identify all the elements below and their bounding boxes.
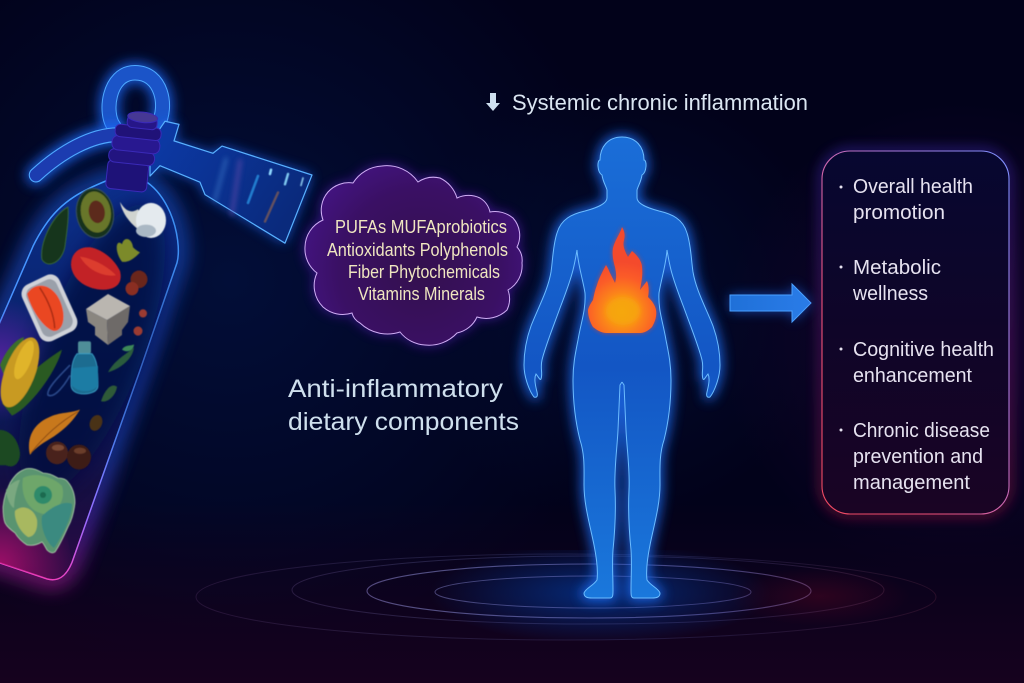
body silhouette xyxy=(524,137,622,598)
small leaf yellow xyxy=(117,239,140,262)
herb sprigs xyxy=(108,344,134,372)
label: anti-inflammatory dietary components xyxy=(288,375,519,436)
hazelnuts xyxy=(126,271,148,295)
cloud shape xyxy=(305,166,522,345)
cabbage xyxy=(3,468,75,553)
list: outcomes: management xyxy=(853,472,970,494)
broccoli xyxy=(0,430,20,466)
left arm xyxy=(36,135,118,175)
list: outcomes: Metabolic xyxy=(853,257,941,279)
berries xyxy=(134,309,147,336)
list: outcomes xyxy=(840,176,994,494)
wire curl xyxy=(48,365,70,396)
avocado xyxy=(73,185,117,241)
list: outcomes: promotion xyxy=(853,202,945,224)
tofu cube xyxy=(86,294,130,345)
label: anti-inflammatory dietary components: dietary components xyxy=(288,408,519,436)
bottle dark interior xyxy=(0,187,195,513)
leaf: dark green xyxy=(42,207,68,264)
floor rings xyxy=(196,550,936,640)
garlic xyxy=(120,202,166,238)
list: outcomes: enhancement xyxy=(853,365,972,387)
food items xyxy=(0,185,166,553)
oil bottle xyxy=(71,341,98,394)
salmon plate xyxy=(18,271,81,345)
human body figure xyxy=(524,137,720,598)
list: outcomes: Overall health xyxy=(853,176,973,198)
bottle neck and cap xyxy=(105,109,163,193)
extinguisher bottle of foods xyxy=(0,73,312,580)
icon: flame xyxy=(588,227,656,333)
lever nozzle xyxy=(150,121,312,243)
corn xyxy=(0,332,62,416)
label: anti-inflammatory dietary components: Anti-inflammatory xyxy=(288,375,504,403)
cloud text: Vitamins Minerals xyxy=(358,284,485,304)
body glow xyxy=(524,137,720,598)
icon: down arrow xyxy=(486,93,500,111)
nuts pair xyxy=(46,442,91,469)
cloud text: Antioxidants Polyphenols xyxy=(327,240,508,260)
panel frame xyxy=(822,151,1009,514)
cloud of nutrients xyxy=(305,166,522,345)
bottle body xyxy=(0,180,178,580)
cloud text xyxy=(327,217,508,304)
bottle glow xyxy=(0,180,178,580)
wheat feather xyxy=(29,409,80,455)
heading: systemic chronic inflammation: Systemic chronic inflammation xyxy=(512,90,808,115)
olive branch xyxy=(87,385,117,433)
handle ring xyxy=(109,73,163,126)
red pepper xyxy=(71,247,121,290)
list: outcomes: wellness xyxy=(852,283,928,305)
cloud text: PUFAs MUFAprobiotics xyxy=(335,217,507,237)
panel: health outcomes xyxy=(822,151,1009,514)
cloud text: Fiber Phytochemicals xyxy=(348,262,500,282)
list: outcomes: Cognitive health xyxy=(853,339,994,361)
list: outcomes: prevention and xyxy=(853,446,983,468)
arrow to outcomes xyxy=(730,284,811,322)
list: outcomes: Chronic disease xyxy=(853,420,990,442)
